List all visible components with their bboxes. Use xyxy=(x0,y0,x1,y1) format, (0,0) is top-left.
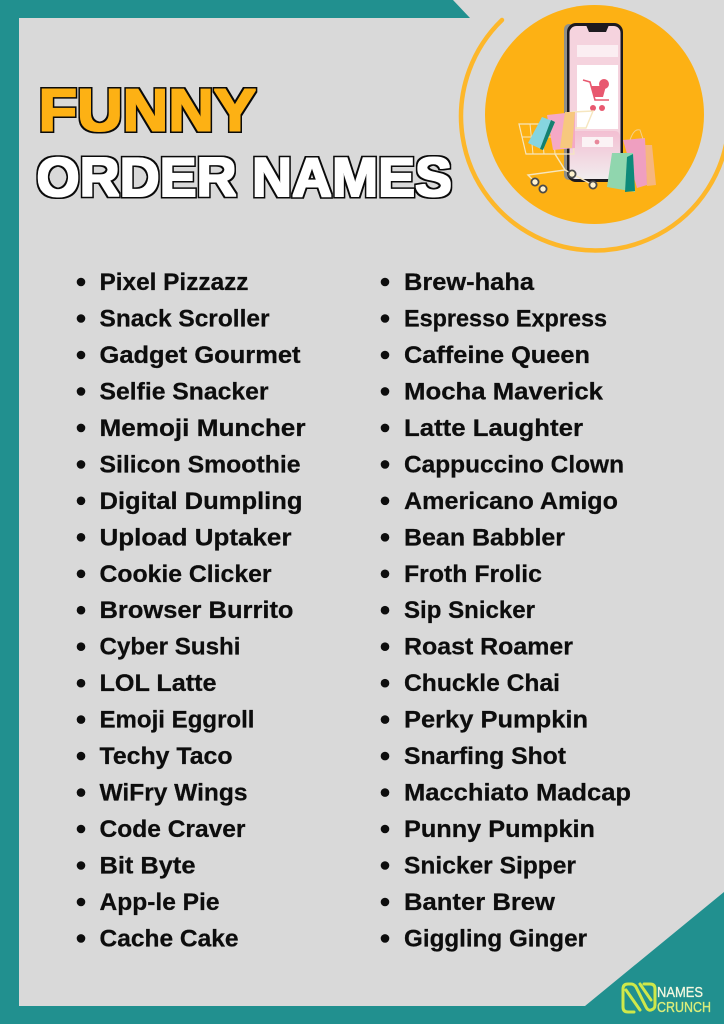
icon: N mark xyxy=(623,984,655,1012)
wordmark xyxy=(657,985,711,1016)
shopping cart xyxy=(519,111,597,193)
list: right column: Latte Laughter xyxy=(404,415,583,442)
list: right column: Caffeine Queen xyxy=(404,342,590,369)
list: right column: Espresso Express xyxy=(404,306,607,332)
list: left column xyxy=(77,269,306,952)
list: right column: Macchiato Madcap xyxy=(404,780,631,807)
list: right column: Mocha Maverick xyxy=(404,378,604,405)
title: FUNNY xyxy=(38,78,256,144)
list: left column: Memoji Muncher xyxy=(100,415,306,442)
list: right column: Banter Brew xyxy=(404,889,555,916)
list: right column: Chuckle Chai xyxy=(404,670,560,697)
list: right column: Snicker Sipper xyxy=(404,852,576,880)
list: left column: Emoji Eggroll xyxy=(100,707,254,734)
list: right column xyxy=(381,269,631,952)
list: right column: Roast Roamer xyxy=(404,634,573,661)
list: right column: Perky Pumpkin xyxy=(404,707,588,734)
wordmark: NAMES xyxy=(657,985,703,1001)
cart icon on phone xyxy=(583,79,609,111)
list bullets: left xyxy=(77,278,85,943)
list: left column: LOL Latte xyxy=(100,670,216,697)
list: left column: Cyber Sushi xyxy=(100,634,240,661)
shopping bags xyxy=(607,130,656,192)
list: left column: Silicon Smoothie xyxy=(100,451,300,478)
list: left column: App-le Pie xyxy=(100,889,220,916)
list: right column: Giggling Ginger xyxy=(404,925,587,952)
list: left column: Techy Taco xyxy=(100,743,232,770)
list: right column: Bean Babbler xyxy=(404,524,565,551)
list: left column: Upload Uptaker xyxy=(100,524,292,551)
logo: Names Crunch xyxy=(623,984,711,1016)
list: left column: Digital Dumpling xyxy=(100,488,302,515)
list: left column: Code Craver xyxy=(100,816,246,843)
list: right column: Cappuccino Clown xyxy=(404,451,624,478)
list: left column: WiFry Wings xyxy=(100,780,248,807)
list: right column: Punny Pumpkin xyxy=(404,816,595,843)
list: right column: Brew-haha xyxy=(404,269,535,296)
title xyxy=(36,78,452,208)
illustration: phone shopping xyxy=(461,5,724,250)
list: left column: Cache Cake xyxy=(100,925,238,952)
list: right column: Sip Snicker xyxy=(404,597,535,624)
list: left column: Selfie Snacker xyxy=(100,378,268,405)
ring arc xyxy=(461,20,724,250)
list: right column: Snarfing Shot xyxy=(404,743,566,770)
list: left column: Pixel Pizzazz xyxy=(100,269,248,296)
list: left column: Bit Byte xyxy=(100,852,196,880)
phone xyxy=(564,23,623,182)
list: left column: Cookie Clicker xyxy=(100,561,272,588)
list: left column: Gadget Gourmet xyxy=(100,342,300,369)
title: ORDER NAMES xyxy=(36,146,452,208)
list: right column: Americano Amigo xyxy=(404,488,618,515)
wordmark: CRUNCH xyxy=(657,1000,711,1016)
cart bags xyxy=(528,112,575,150)
list bullets: right xyxy=(381,278,389,943)
orange circle xyxy=(485,5,704,224)
list: left column: Browser Burrito xyxy=(100,597,294,624)
list: left column: Snack Scroller xyxy=(100,306,270,332)
list: right column: Froth Frolic xyxy=(404,561,542,588)
